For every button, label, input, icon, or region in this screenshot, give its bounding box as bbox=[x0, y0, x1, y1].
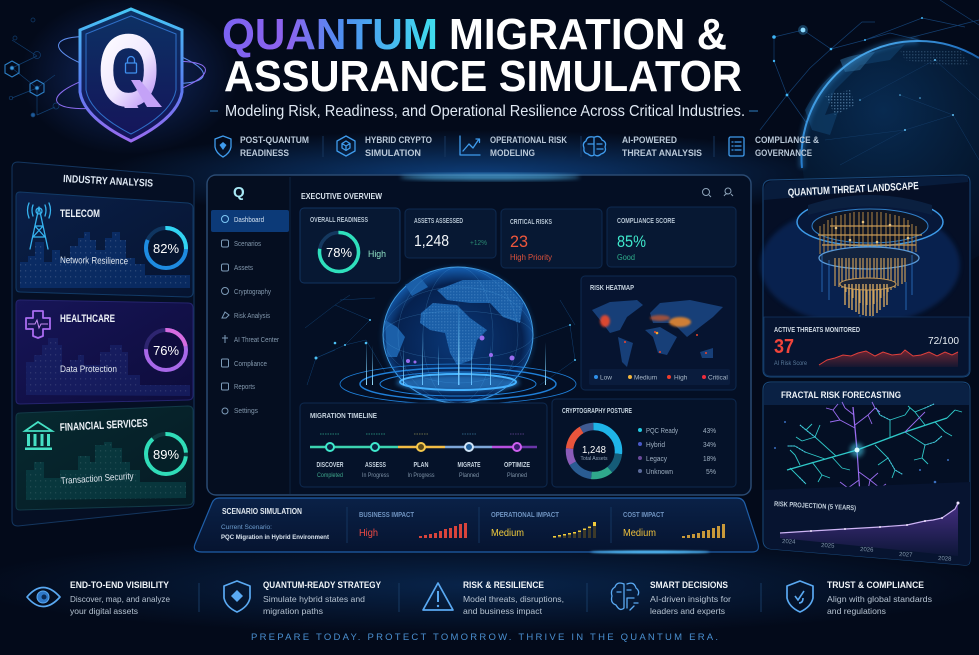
legend: Low bbox=[600, 374, 612, 382]
business impact: High bbox=[359, 527, 378, 539]
donut: 76% bbox=[146, 330, 186, 370]
card: assets assessed: ASSETS ASSESSED bbox=[414, 218, 463, 225]
feature: compliance and governance bbox=[729, 135, 819, 159]
icon: medical cross bbox=[26, 311, 50, 338]
heading: quantum threat landscape: QUANTUM THREAT LANDSCAPE bbox=[788, 180, 919, 199]
benefit: quantum-ready strategy bbox=[224, 580, 381, 616]
quantum computer chandelier bbox=[797, 195, 943, 318]
feature: post-quantum readiness bbox=[215, 135, 309, 159]
legend: Medium bbox=[634, 374, 657, 382]
fractal visualization bbox=[774, 402, 962, 495]
text: financial services: FINANCIAL SERVICES bbox=[60, 417, 148, 434]
card: compliance score bbox=[607, 207, 736, 267]
risk projection chart bbox=[764, 482, 970, 565]
panel: quantum threat landscape bbox=[760, 175, 970, 377]
text: network resilience: Network Resilience bbox=[60, 255, 128, 267]
feature: operational risk modeling bbox=[460, 135, 567, 159]
icons: search and user bbox=[702, 188, 733, 197]
donut: 89%: 89% bbox=[153, 447, 179, 462]
menu: settings bbox=[222, 408, 258, 415]
earth with constellation bbox=[760, 0, 979, 273]
light beams bbox=[366, 300, 546, 385]
threat stats: ACTIVE THREATS MONITORED bbox=[774, 327, 860, 334]
benefit: smart decisions: leaders and experts bbox=[650, 606, 725, 616]
card: assets assessed: +12% bbox=[470, 240, 487, 247]
benefit: risk and resilience bbox=[423, 580, 564, 616]
benefit: smart decisions: AI-driven insights for bbox=[650, 594, 731, 604]
card: compliance score: Good bbox=[617, 253, 635, 262]
step labels: DISCOVER bbox=[316, 462, 344, 469]
step labels: Planned bbox=[459, 473, 479, 479]
heading: industry analysis: INDUSTRY ANALYSIS bbox=[63, 173, 153, 190]
sidebar bbox=[208, 176, 290, 494]
step labels: MIGRATE bbox=[458, 462, 481, 469]
card: overall readiness: High bbox=[368, 249, 386, 259]
active item: dashboard: Dashboard bbox=[234, 217, 264, 224]
menu: scenarios bbox=[222, 240, 261, 248]
risk projection chart: RISK PROJECTION (5 YEARS) bbox=[774, 501, 856, 512]
legend rows: PQC Ready bbox=[646, 426, 678, 435]
benefit: end-to-end visibility: END-TO-END VISIBILITY bbox=[70, 580, 169, 590]
menu: risk analysis: Risk Analysis bbox=[234, 313, 270, 320]
timeline line bbox=[310, 443, 537, 451]
feature: ai-powered threat analysis: AI-POWERED bbox=[622, 135, 677, 146]
icon: bank building bbox=[25, 422, 52, 450]
scenario text: Current Scenario: bbox=[221, 524, 272, 531]
card: critical risks bbox=[501, 209, 602, 268]
step labels: OPTIMIZE bbox=[504, 462, 530, 469]
benefit: trust and compliance bbox=[787, 580, 932, 616]
dashboard frame bbox=[207, 174, 751, 495]
card: financial services bbox=[16, 406, 193, 510]
panel: risk heatmap bbox=[581, 276, 736, 390]
panel: scenario simulation bbox=[194, 498, 758, 554]
menu: compliance bbox=[222, 359, 267, 368]
donut: 89% bbox=[146, 434, 186, 474]
globe with network bbox=[305, 266, 576, 406]
step labels: PLAN bbox=[414, 462, 428, 469]
menu: cryptography bbox=[222, 288, 271, 296]
step labels bbox=[316, 462, 530, 479]
panel: migration timeline bbox=[300, 403, 547, 487]
benefit: risk and resilience: Model threats, disruptions, bbox=[463, 594, 564, 604]
legend rows: 34% bbox=[703, 440, 716, 449]
heading: cryptography posture: CRYPTOGRAPHY POSTURE bbox=[562, 408, 632, 415]
legend rows: 5% bbox=[706, 467, 716, 476]
benefit: end-to-end visibility: Discover, map, and analyze bbox=[70, 594, 170, 604]
heading: executive overview: EXECUTIVE OVERVIEW bbox=[301, 191, 383, 201]
card: healthcare bbox=[16, 300, 193, 404]
card: assets assessed bbox=[405, 209, 496, 258]
logo: quantum shield bbox=[53, 9, 209, 141]
rings bbox=[340, 364, 576, 404]
feature: post-quantum readiness: POST-QUANTUM bbox=[240, 135, 309, 146]
feature row bbox=[215, 135, 819, 159]
panel: fractal risk forecasting bbox=[763, 382, 970, 565]
scenario text: SCENARIO SIMULATION bbox=[222, 507, 302, 516]
logo: quantum shield: Q bbox=[100, 18, 157, 123]
subtitle: Modeling Risk, Readiness, and Operational Resilience Across Critical Industries. bbox=[225, 103, 745, 120]
title bbox=[222, 10, 742, 101]
menu: reports: Reports bbox=[234, 384, 255, 391]
tagline: PREPARE TODAY. PROTECT TOMORROW. THRIVE IN THE QUANTUM ERA. bbox=[251, 632, 718, 643]
benefit: trust and compliance: and regulations bbox=[827, 606, 886, 616]
card: overall readiness bbox=[300, 208, 400, 283]
card: overall readiness: 78% bbox=[326, 245, 352, 260]
menu: risk analysis bbox=[222, 312, 270, 320]
menu: assets: Assets bbox=[234, 265, 253, 272]
risk projection chart: 2028 bbox=[938, 556, 952, 563]
legend rows: Unknown bbox=[646, 467, 673, 476]
benefit: smart decisions bbox=[611, 580, 731, 616]
feature: ai-powered threat analysis: THREAT ANALYSIS bbox=[622, 148, 702, 159]
legend: High bbox=[674, 374, 688, 382]
feature: hybrid crypto simulation: SIMULATION bbox=[365, 148, 421, 159]
network nodes left of logo bbox=[5, 18, 59, 117]
donut: 76%: 76% bbox=[153, 343, 179, 358]
panel: industry analysis bbox=[12, 162, 194, 526]
heading: risk heatmap: RISK HEATMAP bbox=[590, 283, 634, 292]
legend bbox=[589, 369, 730, 385]
text: healthcare: HEALTHCARE bbox=[60, 313, 115, 325]
feature: hybrid crypto simulation bbox=[337, 135, 432, 159]
operational impact: OPERATIONAL IMPACT bbox=[491, 512, 560, 519]
step labels: Planned bbox=[507, 473, 527, 479]
threat stats: AI Risk Score bbox=[774, 360, 807, 367]
menu: reports bbox=[222, 383, 255, 391]
threat stats: 72/100 bbox=[928, 335, 959, 347]
legend: Critical bbox=[708, 374, 728, 382]
sparkline bbox=[819, 350, 958, 367]
menu: ai threat center bbox=[222, 335, 280, 344]
feature: compliance and governance: GOVERNANCE bbox=[755, 148, 812, 159]
risk projection chart: 2027 bbox=[899, 552, 913, 559]
title: QUANTUM bbox=[222, 10, 438, 59]
card: assets assessed: 1,248 bbox=[414, 233, 449, 250]
bottom benefits bbox=[27, 580, 932, 616]
legend rows: 18% bbox=[703, 454, 716, 463]
benefit: quantum-ready strategy: QUANTUM-READY STRATEGY bbox=[263, 580, 381, 590]
legend rows: Legacy bbox=[646, 454, 667, 463]
risk projection chart: 2025 bbox=[821, 543, 835, 550]
step labels: In Progress bbox=[362, 473, 389, 479]
benefit: smart decisions: SMART DECISIONS bbox=[650, 580, 728, 590]
sidebar logo: Q bbox=[233, 184, 245, 201]
card: compliance score: COMPLIANCE SCORE bbox=[617, 218, 675, 225]
risk projection chart: 2024 bbox=[782, 539, 796, 546]
threat stats bbox=[774, 327, 959, 367]
legend rows bbox=[638, 426, 716, 476]
benefit: trust and compliance: TRUST & COMPLIANCE bbox=[827, 580, 924, 590]
feature: post-quantum readiness: READINESS bbox=[240, 148, 289, 159]
card: critical risks: 23 bbox=[510, 232, 528, 251]
benefit: end-to-end visibility bbox=[27, 580, 170, 616]
benefit: end-to-end visibility: your digital assets bbox=[70, 606, 138, 616]
cost impact: COST IMPACT bbox=[623, 512, 665, 519]
card: overall readiness: OVERALL READINESS bbox=[310, 215, 368, 224]
operational impact bbox=[491, 512, 596, 539]
menu: ai threat center: AI Threat Center bbox=[234, 337, 280, 344]
scenario text bbox=[221, 507, 330, 541]
benefit: quantum-ready strategy: migration paths bbox=[263, 606, 323, 616]
menu: assets bbox=[222, 264, 253, 272]
donut chart bbox=[570, 426, 618, 476]
donut: 82% bbox=[146, 228, 186, 268]
feature: ai-powered threat analysis bbox=[583, 135, 702, 159]
feature: operational risk modeling: OPERATIONAL RISK bbox=[490, 135, 567, 146]
donut center text: 1,248 bbox=[582, 444, 606, 456]
card: critical risks: CRITICAL RISKS bbox=[510, 219, 552, 226]
menu: scenarios: Scenarios bbox=[234, 241, 261, 248]
text: telecom: TELECOM bbox=[60, 208, 100, 220]
legend rows: 43% bbox=[703, 426, 716, 435]
operational impact: Medium bbox=[491, 527, 524, 539]
icon: cell tower bbox=[28, 203, 50, 249]
card: compliance score: 85% bbox=[617, 232, 646, 251]
title: MIGRATION & bbox=[449, 10, 727, 59]
world map bbox=[592, 300, 723, 367]
step labels: Completed bbox=[317, 473, 343, 479]
donut center text bbox=[580, 444, 608, 462]
benefit: quantum-ready strategy: Simulate hybrid states and bbox=[263, 594, 365, 604]
scenario text: PQC Migration in Hybrid Environment bbox=[221, 534, 330, 541]
benefit: trust and compliance: Align with global standards bbox=[827, 594, 932, 604]
cost impact: Medium bbox=[623, 527, 656, 539]
panel: cryptography posture bbox=[552, 399, 736, 487]
business impact bbox=[359, 512, 467, 539]
menu: settings: Settings bbox=[234, 408, 258, 415]
menu: cryptography: Cryptography bbox=[234, 289, 271, 296]
heading: migration timeline: MIGRATION TIMELINE bbox=[310, 411, 377, 420]
feature: compliance and governance: COMPLIANCE & bbox=[755, 135, 819, 146]
feature: hybrid crypto simulation: HYBRID CRYPTO bbox=[365, 135, 432, 146]
benefit: risk and resilience: and business impact bbox=[463, 606, 543, 616]
card: telecom bbox=[16, 192, 193, 297]
card: critical risks: High Priority bbox=[510, 253, 552, 262]
risk projection chart: 2026 bbox=[860, 547, 874, 554]
subtitle dashes bbox=[210, 110, 758, 112]
menu: compliance: Compliance bbox=[234, 361, 267, 368]
active item: dashboard bbox=[211, 210, 289, 232]
step labels: ASSESS bbox=[365, 462, 386, 469]
business impact: BUSINESS IMPACT bbox=[359, 512, 415, 519]
benefit: risk and resilience: RISK & RESILIENCE bbox=[463, 580, 544, 590]
small glyphs bbox=[320, 433, 524, 435]
text: data protection: Data Protection bbox=[60, 364, 117, 375]
donut: 82%: 82% bbox=[153, 241, 179, 256]
heading: fractal risk forecasting: FRACTAL RISK FORECASTING bbox=[781, 390, 901, 401]
title: ASSURANCE SIMULATOR bbox=[224, 52, 742, 101]
feature: operational risk modeling: MODELING bbox=[490, 148, 535, 159]
step labels: In Progress bbox=[408, 473, 434, 479]
donut center text: Total Assets bbox=[580, 456, 608, 462]
text: transaction security: Transaction Security bbox=[60, 471, 134, 487]
threat stats: 37 bbox=[774, 336, 794, 358]
cost impact bbox=[623, 512, 725, 539]
legend rows: Hybrid bbox=[646, 440, 665, 449]
